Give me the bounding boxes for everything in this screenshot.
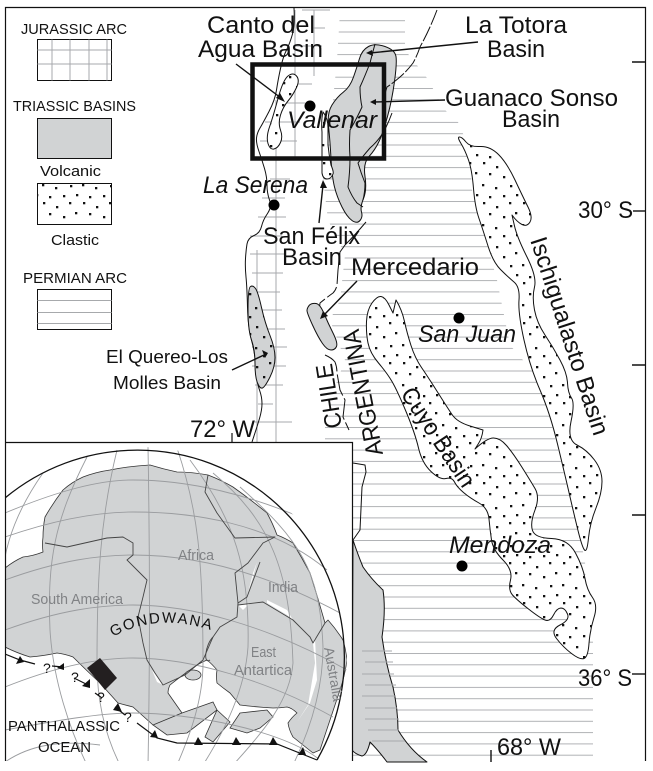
southern fragments <box>153 702 217 735</box>
volcanic coastal basin, lower centre <box>352 540 427 762</box>
border line segment <box>353 463 366 540</box>
label: San Félix Basin with leader: Basin <box>282 244 342 271</box>
label: San Félix Basin with leader: San Félix <box>263 223 360 250</box>
latitude label: 36° S: 36° S <box>578 665 632 692</box>
graticule <box>0 447 347 765</box>
question marks on trench: ? <box>43 660 51 676</box>
coastline <box>245 8 294 442</box>
label: Chile: CHILE <box>311 362 348 430</box>
basin: La Totora and Guanaco Sonso <box>328 44 396 222</box>
label: Guanaco Sonso Basin with leader: Basin <box>502 106 560 133</box>
white rifts <box>152 562 317 722</box>
label: La Totora Basin with leader: La Totora <box>465 12 568 39</box>
city: La Serena: La Serena <box>203 172 308 199</box>
map background: Jurassic arc grid <box>250 10 330 442</box>
legend: Jurassic arc: JURASSIC ARC <box>21 21 127 38</box>
label: Ischigualasto Basin: Ischigualasto Basin <box>524 234 614 439</box>
legend: Triassic basins, volcanic: TRIASSIC BASINS <box>13 98 136 115</box>
longitude label: 68° W: 68° W <box>497 734 561 761</box>
question marks on trench: ? <box>97 689 105 705</box>
label: Guanaco Sonso Basin with leader <box>370 85 618 133</box>
question marks on trench: ? <box>71 669 79 685</box>
label: Cuyo Basin: Cuyo Basin <box>395 382 480 492</box>
subduction zone trench with teeth <box>5 654 317 760</box>
basin: El Quereo-Los Molles <box>248 286 275 388</box>
latitude label: 30° S: 30° S <box>578 197 633 224</box>
city: Vallenar: Vallenar <box>287 107 378 134</box>
study area marker <box>87 658 117 690</box>
inset label: Africa: Africa <box>178 547 215 564</box>
legend: Triassic basins, clastic <box>38 184 112 249</box>
legend: Triassic basins, volcanic: Volcanic <box>40 163 102 180</box>
label: El Quereo-Los Molles Basin with leader: Molles Basin <box>113 373 221 393</box>
inset label: Gondwana: GONDWANA <box>110 612 210 635</box>
inset: Gondwana globe <box>6 447 352 761</box>
inset label: Australia: Australia <box>321 646 346 703</box>
inset label: Panthalassic Ocean: PANTHALASSIC <box>8 718 120 735</box>
inset label: South America: South America <box>31 591 124 608</box>
city: Mendoza <box>449 532 551 572</box>
question marks on trench <box>44 664 132 722</box>
legend: Triassic basins, volcanic <box>13 98 136 180</box>
longitude label: 72° W: 72° W <box>190 416 255 443</box>
city: La Serena <box>203 172 308 210</box>
latitude ticks <box>632 62 645 515</box>
legend: Permian arc: PERMIAN ARC <box>23 270 127 287</box>
legend <box>13 21 136 330</box>
inset label: India: India <box>268 579 299 596</box>
study area rectangle <box>252 64 384 158</box>
inset label: East Antartica: Antartica <box>234 662 293 679</box>
Gondwana landmass <box>0 447 347 765</box>
basin: Ischigualasto <box>459 137 602 550</box>
legend: Permian arc <box>23 270 127 330</box>
inset label: East Antartica: East <box>251 644 277 661</box>
label: Mercedario with leader <box>320 254 479 319</box>
label: Guanaco Sonso Basin with leader: Guanaco Sonso <box>445 85 618 112</box>
question marks on trench: ? <box>124 709 132 725</box>
city: San Juan: San Juan <box>418 321 516 348</box>
basin: San Félix <box>322 112 333 179</box>
plate boundaries <box>45 475 325 685</box>
label: San Félix Basin with leader <box>263 180 360 271</box>
label: Mercedario with leader: Mercedario <box>351 254 479 281</box>
label: El Quereo-Los Molles Basin with leader <box>106 347 268 393</box>
globe outline <box>5 450 344 760</box>
map background: Permian arc horizontal lines <box>322 12 593 762</box>
label: La Totora Basin with leader <box>366 12 568 63</box>
basin: Canto del Agua <box>267 74 298 149</box>
label: Canto del Agua Basin with leader <box>198 12 323 102</box>
label: La Totora Basin with leader: Basin <box>487 36 545 63</box>
legend: Jurassic arc <box>21 21 127 80</box>
label: Argentina: ARGENTINA <box>338 327 389 458</box>
basin: Cuyo <box>366 296 596 659</box>
Chile-Argentina border, dashed <box>318 10 437 430</box>
legend: Triassic basins, clastic: Clastic <box>51 232 100 249</box>
label: Canto del Agua Basin with leader: Agua Basin <box>198 36 323 63</box>
label: Canto del Agua Basin with leader: Canto del <box>207 12 315 39</box>
basin: Mercedario <box>307 303 337 350</box>
city: Mendoza: Mendoza <box>449 532 551 559</box>
inset label: Panthalassic Ocean <box>9 721 120 752</box>
inset label: East Antartica <box>234 647 292 675</box>
inset label: Panthalassic Ocean: OCEAN <box>38 739 91 756</box>
label: El Quereo-Los Molles Basin with leader: El Quereo-Los <box>106 347 228 367</box>
